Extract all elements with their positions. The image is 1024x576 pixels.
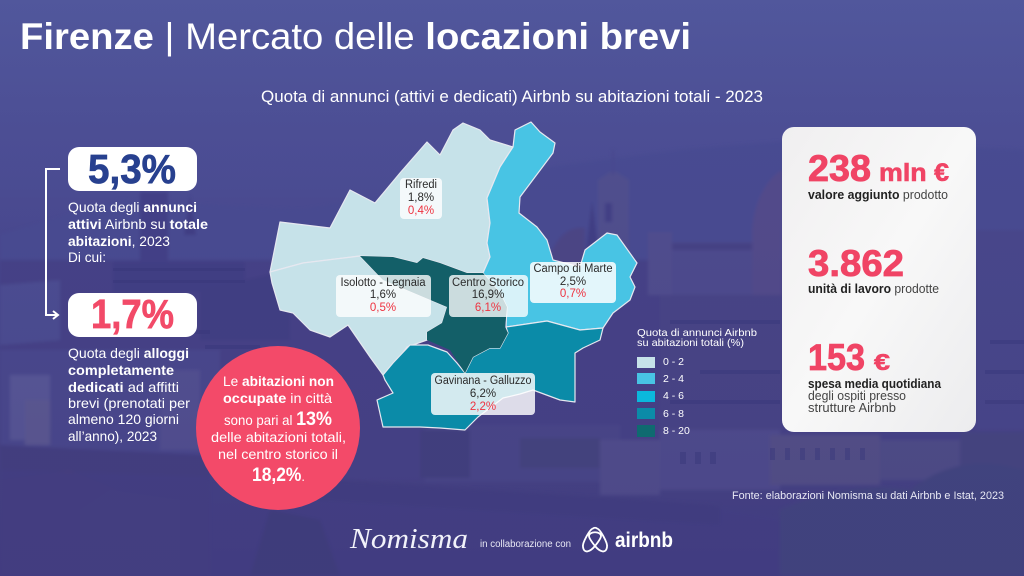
panel: active listings share: Di cui:	[68, 249, 106, 265]
label: Campo di Marte: 0,7%	[560, 288, 586, 300]
district: Isolotto - Legnaia	[270, 256, 447, 375]
callout: unoccupied dwellings: sono pari al 13%	[224, 409, 332, 430]
panel: dedicated listings share: almeno 120 giorni	[68, 411, 179, 427]
label: Isolotto - Legnaia: Isolotto - Legnaia	[340, 277, 426, 289]
legend: su abitazioni totali (%)	[637, 337, 744, 349]
logo: Nomisma: Nomisma	[349, 523, 468, 555]
stat: average daily spend: degli ospiti presso	[808, 389, 906, 403]
stat: work units	[808, 242, 939, 296]
arrow: from total to dedicated share	[46, 169, 60, 319]
stat: added value: 238	[808, 147, 871, 189]
source note: Fonte: elaborazioni Nomisma su dati Airbnb e Istat, 2023	[732, 490, 1004, 502]
callout: unoccupied dwellings: Le abitazioni non	[223, 373, 334, 389]
label: Gavinana - Galluzzo	[431, 373, 535, 415]
panel: dedicated listings share: completamente	[68, 362, 174, 378]
panel: dedicated listings share	[68, 291, 197, 444]
label: Isolotto - Legnaia	[336, 275, 431, 317]
label: Isolotto - Legnaia: 1,6%	[370, 289, 396, 301]
district: Gavinana - Galluzzo	[377, 321, 603, 430]
choropleth map of Florence districts	[270, 122, 637, 430]
stat: average daily spend	[808, 336, 942, 415]
stat: average daily spend: €	[874, 349, 890, 375]
label: Centro Storico: Centro Storico	[452, 277, 524, 289]
panel: active listings share: abitazioni, 2023	[68, 233, 170, 249]
legend: 0 - 2	[663, 356, 684, 368]
callout: unoccupied dwellings: nel centro storico il	[218, 446, 338, 462]
legend: 2 - 4	[663, 373, 684, 385]
stat: average daily spend: strutture Airbnb	[808, 401, 896, 415]
label: Rifredi: 1,8%	[408, 192, 434, 204]
legend: 8 - 20	[663, 425, 690, 437]
label: Gavinana - Galluzzo: Gavinana - Galluzzo	[434, 375, 532, 387]
district: Rifredi	[270, 123, 513, 273]
stat: work units: unità di lavoro prodotte	[808, 282, 939, 296]
callout: unoccupied dwellings: delle abitazioni totali,	[211, 429, 346, 445]
panel: dedicated listings share: 1,7%	[91, 291, 174, 337]
label: Rifredi: Rifredi	[405, 179, 437, 191]
stat: added value: valore aggiunto prodotto	[808, 188, 948, 202]
callout: unoccupied dwellings: 18,2%.	[252, 465, 305, 486]
panel: active listings share: attivi Airbnb su totale	[68, 216, 208, 232]
label: Centro Storico	[449, 275, 528, 317]
label: Centro Storico: 16,9%	[472, 289, 504, 301]
stat: added value	[808, 147, 949, 202]
label: Isolotto - Legnaia: 0,5%	[370, 302, 396, 314]
label: Campo di Marte: 2,5%	[560, 276, 586, 288]
legend	[637, 327, 757, 437]
label: Centro Storico: 6,1%	[475, 302, 501, 314]
title: Firenze | Mercato delle locazioni brevi	[20, 16, 691, 57]
logo: airbnb wordmark: airbnb	[615, 529, 673, 552]
label: Rifredi	[400, 178, 442, 219]
stat: average daily spend: spesa media quotidiana	[808, 377, 942, 391]
map heading: Quota di annunci (attivi e dedicati) Airbnb su abitazioni totali - 2023	[261, 88, 763, 106]
panel: dedicated listings share: dedicati ad affitti	[68, 379, 179, 395]
callout: unoccupied dwellings	[196, 346, 360, 510]
panel: dedicated listings share: brevi (prenotati per	[68, 395, 190, 411]
icon: Airbnb symbol	[583, 528, 607, 551]
panel: active listings share: Quota degli annunci	[68, 199, 197, 215]
callout: unoccupied dwellings: occupate in città	[223, 390, 332, 406]
stat: added value: mln €	[879, 159, 949, 187]
collaboration text: in collaborazione con	[480, 539, 571, 550]
panel: economic impact card	[782, 127, 976, 432]
panel: active listings share	[68, 146, 208, 265]
stat: work units: 3.862	[808, 242, 904, 284]
label: Gavinana - Galluzzo: 2,2%	[470, 401, 496, 413]
district: Campo di Marte	[483, 122, 637, 330]
legend: 4 - 6	[663, 390, 684, 402]
legend: 6 - 8	[663, 408, 684, 420]
label: Campo di Marte	[530, 262, 616, 303]
panel: dedicated listings share: all’anno), 2023	[68, 428, 157, 444]
label: Rifredi: 0,4%	[408, 205, 434, 217]
district: Centro Storico	[360, 256, 508, 373]
label: Gavinana - Galluzzo: 6,2%	[470, 388, 496, 400]
label: Campo di Marte: Campo di Marte	[534, 263, 612, 275]
panel: active listings share: 5,3%	[88, 146, 176, 192]
panel: dedicated listings share: Quota degli alloggi	[68, 345, 189, 361]
legend: Quota di annunci Airbnb	[637, 327, 757, 339]
stat: average daily spend: 153	[808, 336, 865, 378]
